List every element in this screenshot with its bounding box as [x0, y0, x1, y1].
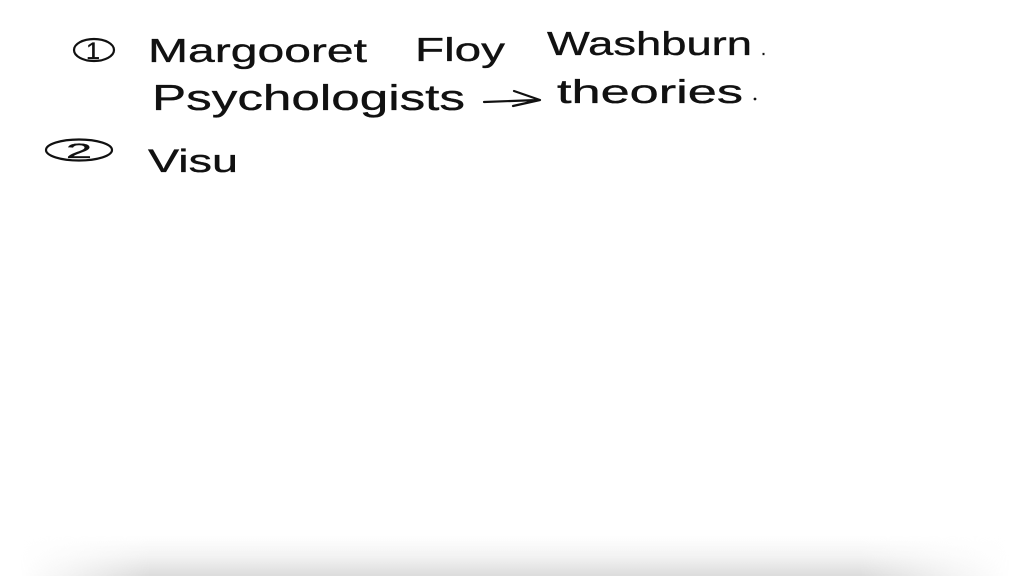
line 1: name [148, 25, 766, 69]
line 1: name: Washburn [547, 25, 752, 62]
line 2: theories: theories [557, 73, 743, 110]
number 1 marker: 1 [86, 38, 100, 65]
arrow [484, 91, 540, 106]
line 1: name: Margooret [148, 32, 367, 69]
line 1: name: Floy [415, 31, 506, 68]
bottom shadow gradient [54, 550, 969, 576]
line 1: name: . [761, 39, 766, 59]
line 3: visu: Visu [148, 143, 238, 179]
line 2: psychologists: Psychologists [152, 77, 465, 118]
number 2 marker [46, 140, 112, 163]
number 2 marker: 2 [66, 140, 92, 163]
number 1 marker [74, 38, 114, 65]
period after theories [754, 98, 756, 100]
